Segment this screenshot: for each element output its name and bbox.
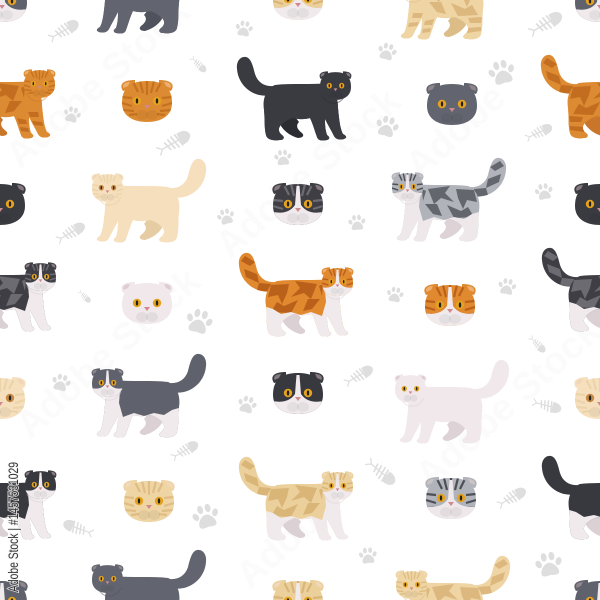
stock credit text: Adobe Stock | #1457531029 bbox=[6, 462, 21, 592]
fish bone bbox=[496, 485, 528, 510]
cat head: orange tabby bbox=[121, 80, 173, 126]
cat head: blue bicolor, bottom-left bbox=[0, 580, 28, 600]
paw print bbox=[273, 149, 293, 166]
fish bone bbox=[189, 55, 208, 74]
cat: lilac bbox=[394, 360, 509, 449]
cat head: lilac bbox=[121, 282, 173, 328]
paw print bbox=[235, 394, 259, 415]
fish bone bbox=[47, 17, 81, 44]
fish bone bbox=[527, 9, 565, 38]
watermark: Adobe bbox=[398, 76, 514, 187]
cat: cream tabby, top edge bbox=[395, 0, 510, 45]
cat: cream bbox=[91, 159, 206, 248]
cat: black bicolor, left edge bbox=[0, 456, 57, 545]
paw print bbox=[485, 57, 518, 87]
cat: black bbox=[237, 57, 352, 146]
cat head: black bicolor bbox=[272, 372, 324, 418]
cat: orange tabby, left edge bbox=[0, 55, 56, 144]
cat: orange tabby, right edge bbox=[541, 55, 600, 144]
paw print bbox=[533, 182, 555, 201]
cat head: cream, left edge bbox=[0, 377, 26, 423]
paw print bbox=[358, 547, 378, 564]
cat head: cream tabby bicolor, top bbox=[272, 0, 324, 24]
cat head: blue bbox=[426, 83, 478, 129]
cat head: cream tabby bicolor, bottom bbox=[272, 580, 324, 600]
cat head: blue bicolor, top-right bbox=[574, 0, 600, 26]
fish bone bbox=[62, 518, 94, 539]
cat: dark tabby bicolor, right edge bbox=[542, 248, 600, 337]
paw print bbox=[533, 550, 565, 578]
cat: black bicolor, right edge bbox=[542, 456, 600, 545]
fish bone bbox=[364, 457, 398, 488]
fish bone bbox=[155, 128, 193, 157]
cat head: orange bicolor bbox=[424, 284, 476, 330]
cat: blue, top edge bbox=[91, 0, 206, 39]
cat: silver tabby bicolor bbox=[391, 158, 506, 247]
fish bone bbox=[343, 363, 375, 388]
cat: cream tabby bicolor bbox=[239, 457, 354, 546]
watermark: Adobe bbox=[228, 486, 344, 597]
paw print bbox=[347, 214, 367, 231]
cat head: silver tabby bbox=[425, 477, 477, 523]
fish bone bbox=[170, 439, 200, 462]
watermark: Adobe Stock bbox=[8, 259, 209, 447]
paw print bbox=[49, 372, 73, 393]
paw print bbox=[189, 501, 222, 531]
paw print bbox=[496, 277, 518, 296]
paw print bbox=[375, 41, 399, 62]
fish bone bbox=[532, 397, 562, 415]
cat head: blue bicolor, bottom-right bbox=[574, 580, 600, 600]
cat: blue, bottom edge bbox=[91, 550, 206, 600]
fish bone bbox=[55, 220, 87, 245]
cat head: blue bicolor, top-left bbox=[0, 0, 28, 26]
cat head: cream tabby bbox=[123, 480, 175, 526]
paw print bbox=[385, 286, 405, 303]
fish bone bbox=[77, 289, 92, 304]
cat: cream tabby, bottom edge bbox=[395, 556, 510, 600]
paw print bbox=[373, 113, 402, 139]
cat head: black, right edge bbox=[574, 183, 600, 229]
watermark: Adobe Stock bbox=[208, 79, 409, 267]
paw print bbox=[183, 306, 216, 336]
cat: dark tabby bicolor, left edge bbox=[0, 248, 57, 337]
cat head: dark tabby bicolor bbox=[272, 183, 324, 229]
fish bone bbox=[528, 335, 547, 354]
cat head: cream, right edge bbox=[574, 377, 600, 423]
cat: orange bicolor bbox=[239, 253, 354, 342]
paw print bbox=[61, 105, 83, 124]
paw print bbox=[234, 19, 255, 37]
cat head: black, left edge bbox=[0, 183, 26, 229]
fish bone bbox=[524, 122, 554, 143]
cat: blue bicolor bbox=[91, 354, 206, 443]
paw print bbox=[215, 207, 237, 226]
